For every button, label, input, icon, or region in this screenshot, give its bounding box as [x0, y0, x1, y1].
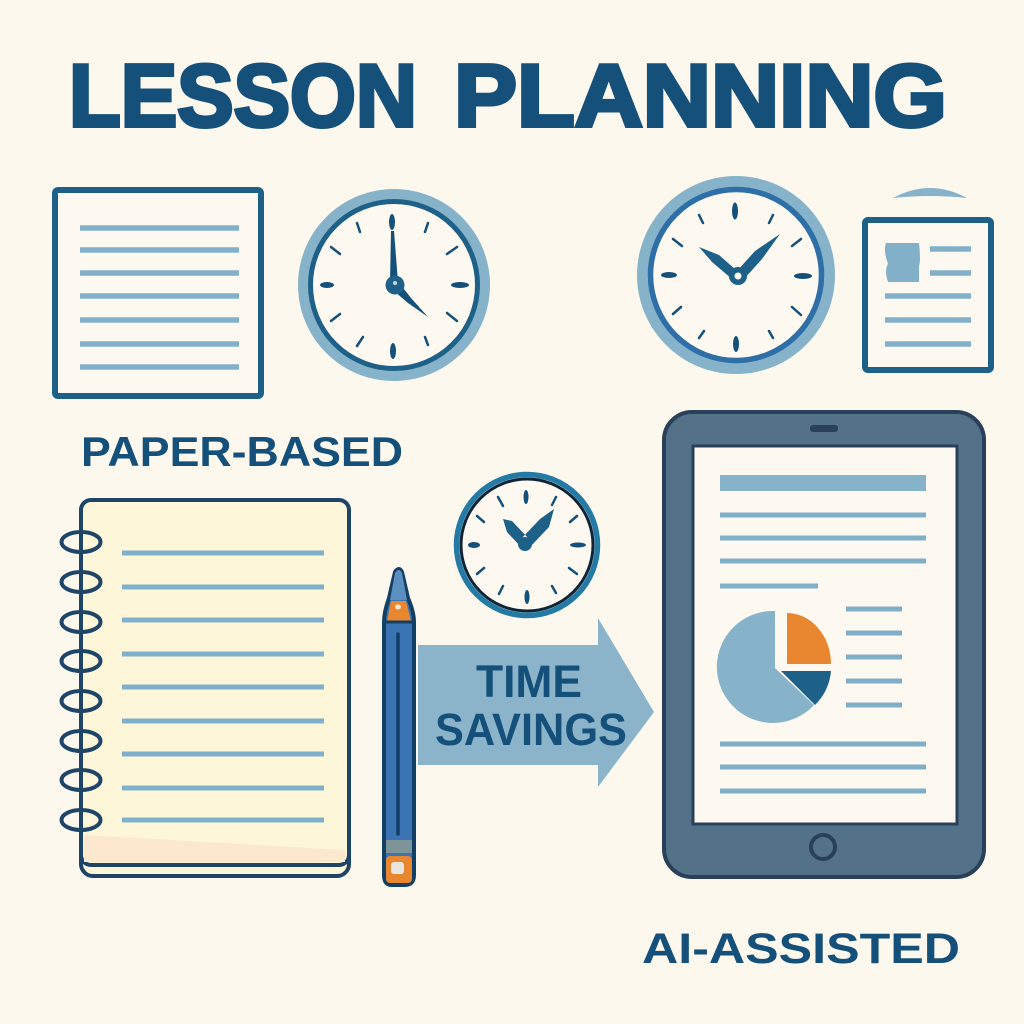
icon: small document	[865, 188, 991, 370]
label: ai-assisted: AI-ASSISTED	[642, 925, 960, 973]
title	[69, 46, 947, 145]
arrow: time savings: SAVINGS	[435, 704, 627, 755]
icon: paper document	[55, 190, 261, 396]
label: paper-based: PAPER-BASED	[81, 428, 403, 475]
icon: tablet	[664, 412, 984, 877]
document lines	[720, 515, 926, 791]
arrow: time savings: TIME	[476, 656, 582, 707]
title: PLANNING	[454, 46, 947, 145]
document header bar	[720, 475, 926, 491]
pie chart	[717, 611, 831, 723]
icon: small clock	[456, 474, 598, 616]
icon: spiral notebook	[62, 500, 349, 876]
icon: clock right	[637, 176, 835, 374]
icon: clock left	[298, 189, 490, 381]
icon: pencil	[384, 569, 414, 885]
arrow: time savings	[418, 618, 654, 787]
title: LESSON	[69, 46, 417, 145]
